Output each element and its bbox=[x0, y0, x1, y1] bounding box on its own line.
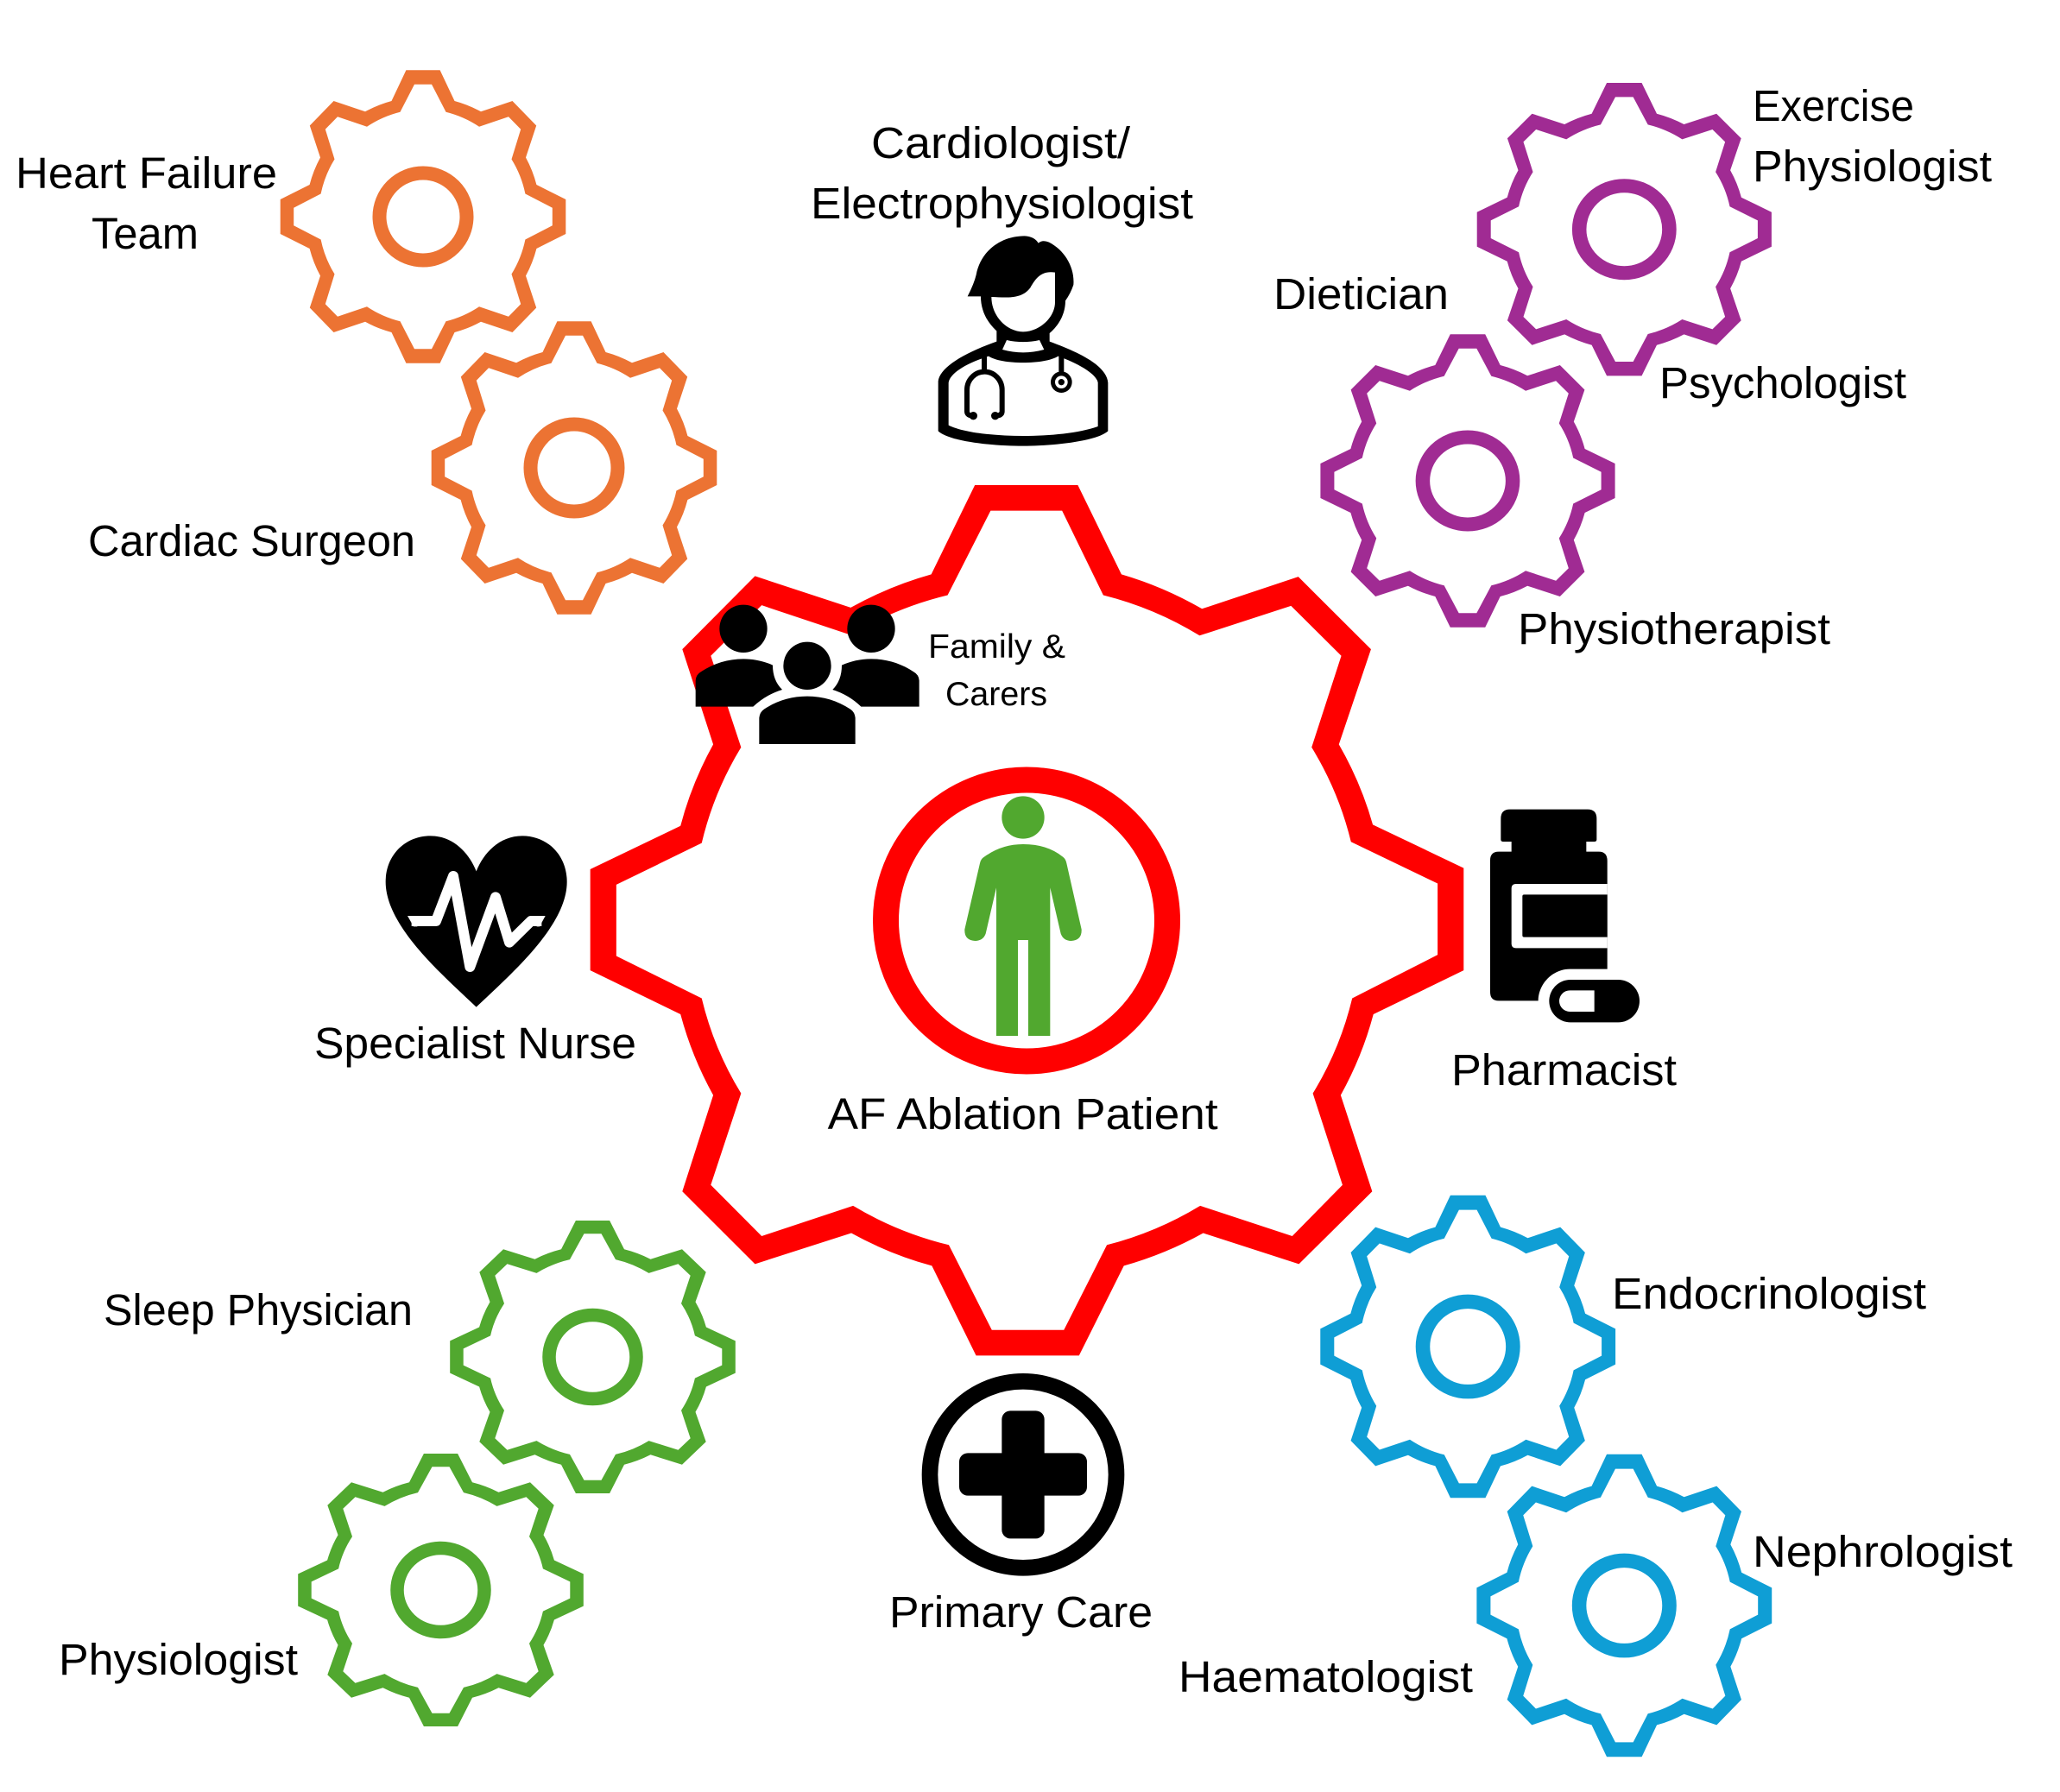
panel: orange gear heart failure team bbox=[281, 70, 566, 363]
label: Cardiac Surgeon: Cardiac Surgeon bbox=[88, 516, 415, 565]
label: AF Ablation Patient: AF Ablation Patient bbox=[828, 1089, 1218, 1139]
panel: purple gear dietician bbox=[1320, 334, 1615, 628]
label: Heart Failure Team: Heart Failure bbox=[16, 148, 277, 198]
label: Endocrinologist: Endocrinologist bbox=[1612, 1269, 1926, 1318]
centre ring bbox=[886, 780, 1167, 1062]
label: Physiotherapist: Physiotherapist bbox=[1518, 604, 1830, 653]
panel: green gear physiologist bbox=[298, 1454, 584, 1726]
icon: patient figure bbox=[964, 796, 1082, 1036]
label: Family and Carers: Family & bbox=[928, 628, 1065, 666]
label: Specialist Nurse: Specialist Nurse bbox=[314, 1019, 636, 1068]
label: Cardiologist / Electrophysiologist: Cardiologist/ bbox=[871, 118, 1131, 167]
label: Cardiologist / Electrophysiologist bbox=[811, 118, 1193, 228]
label: Heart Failure Team: Team bbox=[92, 209, 199, 258]
panel: blue gear nephrologist bbox=[1476, 1454, 1772, 1757]
icon: medicine bottle and pill bbox=[1490, 810, 1640, 1022]
label: Cardiologist / Electrophysiologist: Electrophysiologist bbox=[811, 179, 1193, 228]
icon: primary care cross bbox=[930, 1381, 1116, 1568]
label: Exercise Physiologist bbox=[1753, 81, 1992, 191]
label: Exercise Physiologist: Exercise bbox=[1753, 81, 1914, 130]
label: Exercise Physiologist: Physiologist bbox=[1753, 142, 1992, 191]
label: Psychologist: Psychologist bbox=[1659, 358, 1906, 407]
label: Physiologist: Physiologist bbox=[59, 1635, 298, 1684]
panel: green gear sleep physician bbox=[450, 1221, 736, 1493]
label: Dietician: Dietician bbox=[1273, 269, 1449, 319]
panel: orange gear cardiac surgeon bbox=[432, 321, 717, 615]
label: Family and Carers bbox=[928, 628, 1065, 713]
label: Sleep Physician: Sleep Physician bbox=[104, 1285, 413, 1335]
label: Pharmacist: Pharmacist bbox=[1451, 1045, 1677, 1095]
icon: doctor with stethoscope bbox=[938, 236, 1108, 446]
icon: family and carers bbox=[696, 605, 919, 744]
label: Haematologist: Haematologist bbox=[1178, 1652, 1473, 1701]
label: Family and Carers: Carers bbox=[945, 676, 1047, 713]
label: Heart Failure Team bbox=[16, 148, 277, 258]
central red gear bbox=[591, 485, 1463, 1355]
label: Primary Care: Primary Care bbox=[889, 1587, 1153, 1637]
icon: heart with pulse bbox=[386, 836, 567, 1007]
panel: purple gear exercise physiologist bbox=[1477, 83, 1772, 375]
panel: blue gear endocrinologist bbox=[1320, 1196, 1615, 1498]
label: Nephrologist: Nephrologist bbox=[1753, 1527, 2013, 1576]
